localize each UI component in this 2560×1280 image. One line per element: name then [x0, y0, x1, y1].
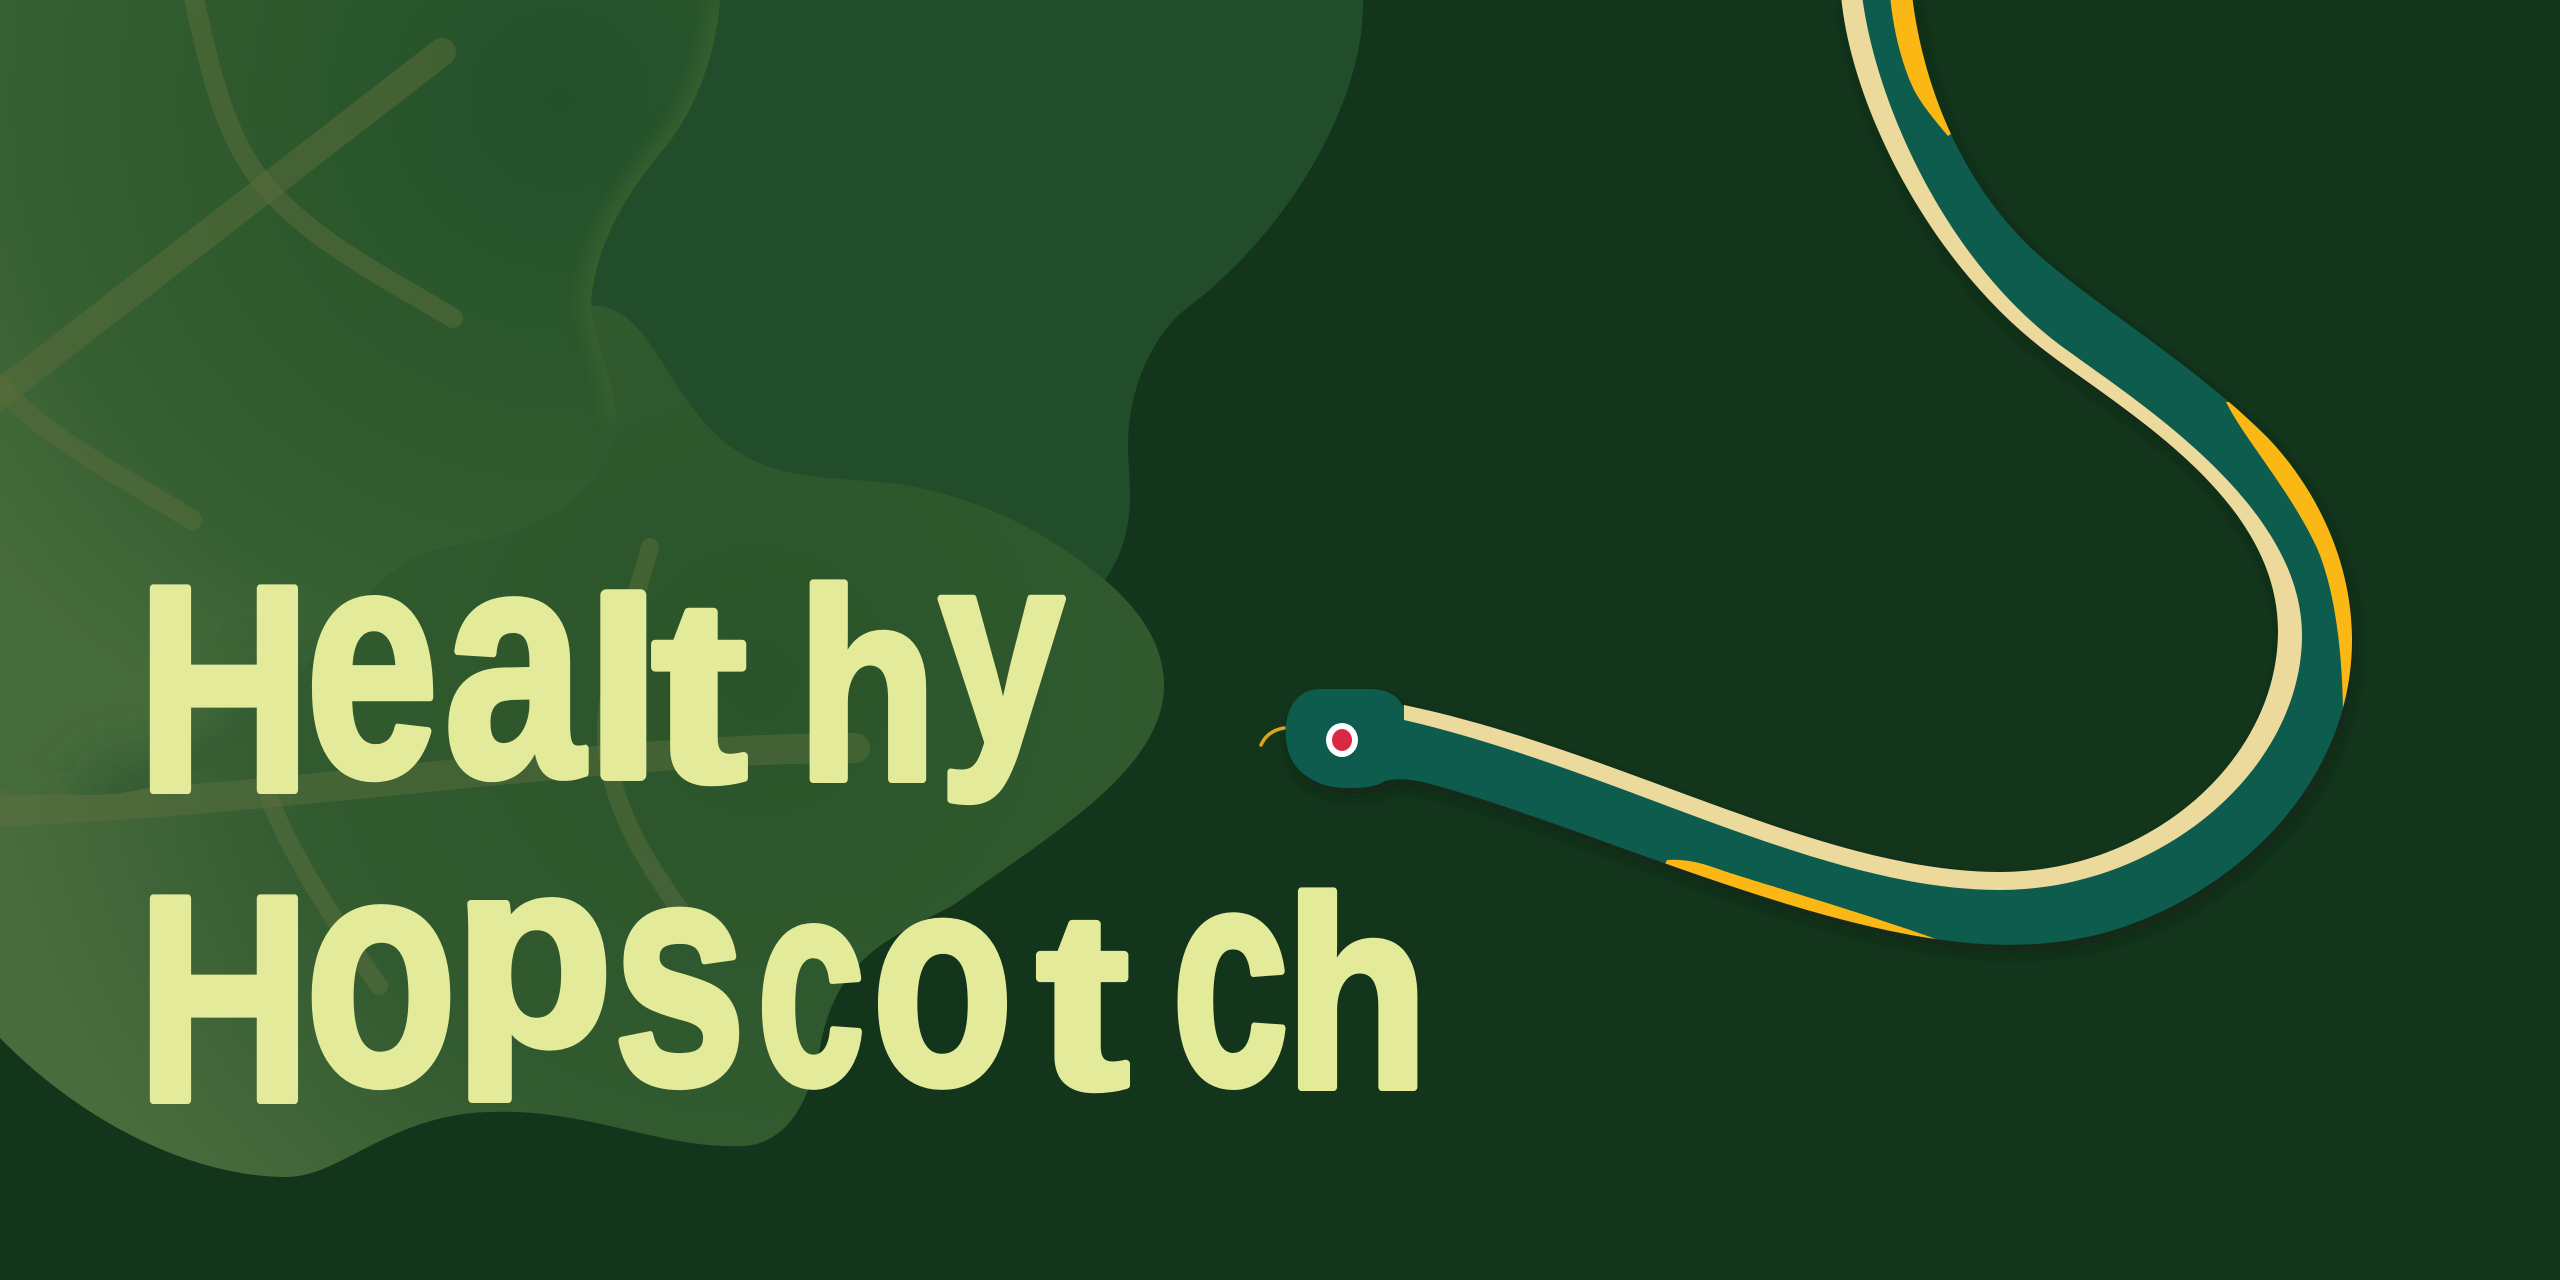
veins: top leaf — [0, 0, 453, 520]
title: c — [1172, 802, 1289, 1149]
snake yellow stripe: top — [1890, 0, 1951, 136]
snake eye — [1326, 723, 1358, 757]
snake — [1259, 0, 2355, 952]
snake yellow stripe: right — [2226, 402, 2352, 708]
leaf: lower front leaf — [0, 300, 1164, 1177]
title: t — [652, 546, 747, 835]
title: c — [757, 821, 865, 1145]
title: t — [1037, 861, 1129, 1140]
title: o — [872, 811, 1013, 1147]
title: o — [305, 789, 457, 1152]
title: h — [797, 536, 937, 837]
snake body and head — [1286, 0, 2352, 945]
snake tongue — [1261, 728, 1284, 745]
title: s — [613, 793, 746, 1151]
title: e — [306, 480, 438, 845]
veins: lower leaf — [0, 547, 855, 986]
title: H — [137, 836, 311, 1163]
snake yellow stripe: bottom — [1665, 860, 1937, 940]
leaf: top-left leaf — [0, 0, 730, 800]
title: y — [939, 496, 1065, 804]
title: l — [589, 550, 658, 828]
title: H — [137, 526, 311, 853]
leaf: large back leaf — [0, 0, 1363, 900]
title: h — [1285, 844, 1428, 1145]
title: a — [444, 481, 586, 844]
snake cream stripe — [1404, 0, 2302, 890]
title: p — [454, 805, 613, 1102]
